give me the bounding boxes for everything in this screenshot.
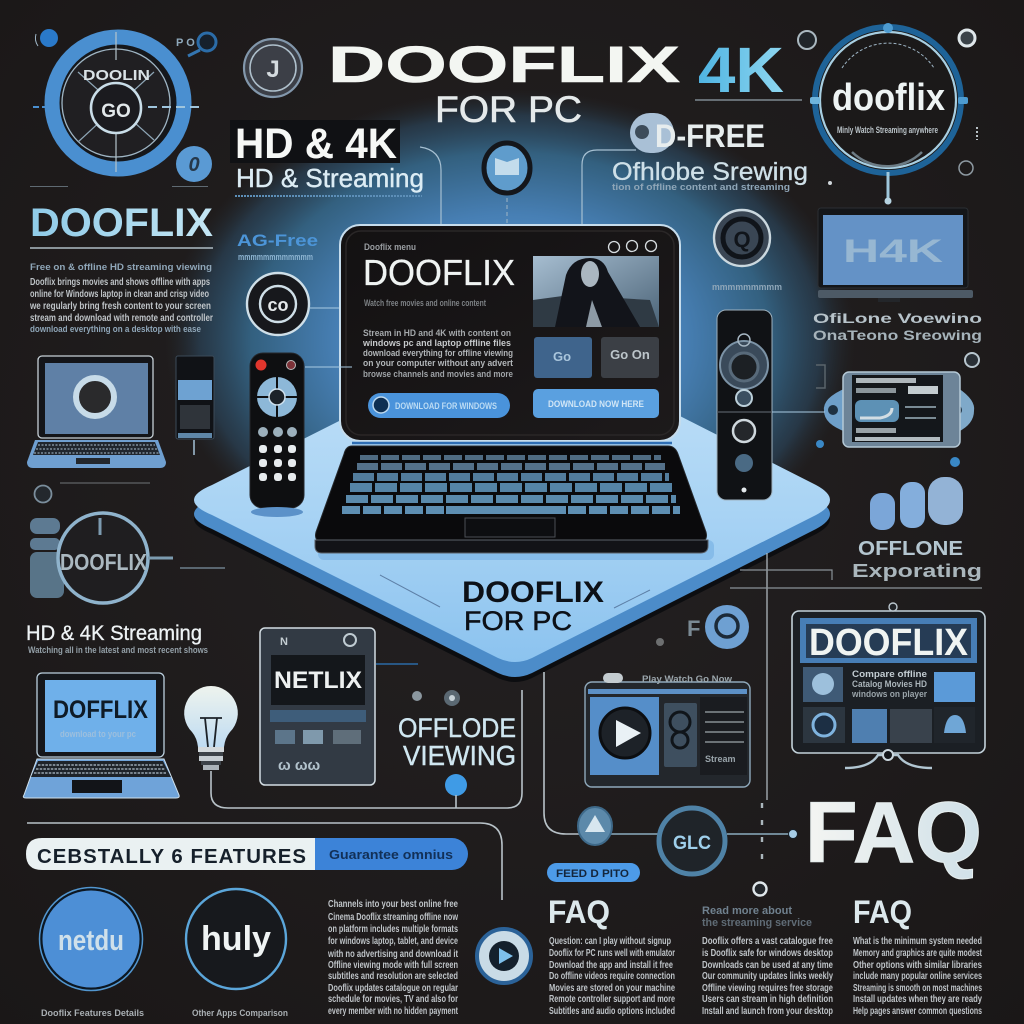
text block: features description: on platform includes multiple formats — [328, 924, 458, 935]
laptop screen: Go On — [610, 347, 650, 362]
connector lines: right lower — [544, 553, 982, 867]
subheading: offline streaming: Ofhlobe Srewing — [612, 158, 808, 186]
panel: netflix tablet: NETLIX — [274, 667, 362, 694]
icon: top centre circle — [484, 143, 530, 193]
laptop screen: DOWNLOAD NOW HERE — [548, 399, 644, 409]
shadow under laptop — [318, 540, 714, 560]
connector end dot — [788, 830, 798, 838]
heading: HD and 4K streaming: HD & 4K Streaming — [26, 622, 202, 645]
laptop screen: DOOFLIX — [363, 252, 515, 293]
faq column one: Remote controller support and more — [549, 994, 675, 1005]
text: Ad-free label — [237, 231, 318, 262]
icon: light bulb — [184, 686, 238, 770]
monitor: top right — [818, 208, 973, 302]
faq column one — [548, 894, 675, 1017]
text block: features description: subtitles and resolution are selected — [328, 971, 458, 982]
text block: features description: with no advertising and download it — [327, 949, 459, 960]
icon: three blue pills — [870, 477, 963, 530]
text block: features description: schedule for movies, TV and also for — [328, 994, 458, 1005]
text block: left description: we regularly bring fresh content to your screen — [29, 301, 211, 312]
small device: left top — [176, 356, 214, 455]
heading: big FAQ: FAQ — [805, 785, 982, 881]
logo: hulu: huly — [201, 920, 271, 958]
features pill: CEBSTALLY 6 FEATURES — [37, 846, 307, 868]
panel: play video: Stream — [705, 754, 736, 764]
icon: right badge: mmmmmmmmm — [712, 282, 782, 292]
text: Ad-free label: mmmmmmmmmmmm — [238, 252, 313, 262]
text block: features description: Dooflix updates catalogue on regular — [328, 983, 458, 994]
laptop screen: browse channels and movies and more — [363, 369, 513, 379]
faq column two: Read more about — [702, 905, 792, 917]
laptop screen: Go — [553, 349, 571, 364]
logo: netdu: netdu — [58, 925, 124, 957]
features pill: Guarantee omnius — [329, 847, 453, 862]
text: offline exporting: OFFLONE — [858, 538, 963, 560]
central blue glow — [120, 80, 910, 600]
pill: blue label — [547, 863, 640, 882]
remote shadow: left — [251, 507, 303, 517]
faq column three: Install updates when they are ready — [853, 994, 982, 1005]
text: offline viewing right: OnaTeono Sreowing — [813, 327, 982, 343]
platform label: DOOFLIX — [462, 576, 604, 609]
monitor: dooflix: Catalog Movies HD — [852, 679, 927, 689]
laptop screen: Dooflix menu — [364, 242, 416, 252]
text block: left description: Dooflix brings movies and shows offline with apps — [30, 277, 210, 288]
dial logo: left middle: DOOFLIX — [60, 549, 148, 575]
laptop screen: on your computer without any advert — [363, 358, 513, 368]
top-left dial icon: GO — [101, 101, 131, 122]
small laptop: dofflix — [23, 673, 179, 798]
panel: netflix tablet: N — [280, 636, 288, 648]
text block: left description: download everything on a desktop with ease — [30, 324, 201, 334]
icon: right badge — [712, 210, 782, 292]
icon: capsule PO: P O — [176, 37, 195, 49]
faq column one: Download the app and install it free — [549, 960, 673, 971]
panel: play video: Play Watch Go Now — [642, 674, 733, 684]
text block: left description: online for Windows laptop in clean and crisp video — [30, 289, 209, 300]
top-right dooflix logo dial: Minly Watch Streaming anywhere — [837, 125, 938, 135]
small laptop: dofflix: download to your pc — [60, 729, 136, 739]
icon: right badge: Q — [733, 227, 751, 252]
faq column one: Question: can I play without signup — [549, 936, 671, 947]
heading: offline viewing: OFFLODE — [398, 713, 516, 743]
faq column two — [702, 905, 833, 1017]
faq column one: FAQ — [548, 894, 610, 930]
faq column two: Dooflix offers a vast catalogue free — [702, 936, 833, 947]
panel: netflix tablet — [260, 628, 418, 785]
small laptop: left top — [27, 356, 166, 468]
text block: left description: stream and download with remote and controller — [30, 313, 213, 324]
laptop keyboard base — [315, 446, 708, 553]
icon: music badge — [244, 39, 302, 97]
icon: F Q badge — [656, 605, 749, 649]
monitor: top right: H4K — [843, 233, 943, 269]
laptop screen — [340, 225, 680, 443]
laptop screen: DOWNLOAD FOR WINDOWS — [395, 401, 497, 411]
text block: features description: Channels into your best online free — [328, 899, 458, 910]
faq column two: Downloads can be used at any time — [702, 960, 833, 971]
monitor: dooflix — [792, 603, 985, 768]
icon: blue zero badge: 0 — [188, 154, 200, 176]
top-left dial icon — [33, 32, 204, 172]
faq column two: the streaming service — [702, 917, 812, 929]
subheading: offline streaming: tion of offline content and streaming — [612, 182, 790, 192]
icon: small ring right of dial — [959, 30, 975, 46]
text: offline viewing right: OfiLone Voewino — [813, 310, 982, 326]
heading: HD and 4K streaming: Watching all in the latest and most recent shows — [28, 645, 208, 655]
text block: features description: Cinema Dooflix streaming offline now — [328, 912, 458, 923]
icon: small ring bottom — [754, 882, 766, 896]
faq column two: Our community updates links weekly — [702, 971, 833, 982]
text: offline exporting — [852, 538, 982, 581]
faq column two: Install and launch from your desktop — [702, 1006, 833, 1017]
faq column one: Movies are stored on your machine — [549, 983, 675, 994]
icon: music badge: J — [266, 56, 280, 83]
pill: blue label: FEED D PITO — [556, 868, 629, 880]
top-left dial icon: DOOLIN — [83, 67, 150, 84]
icon: small ring left — [34, 486, 52, 502]
faq column three: FAQ — [853, 894, 912, 930]
subheading: HD streaming: HD & Streaming — [236, 163, 424, 193]
icon: chip badge — [659, 808, 725, 874]
icon: small ring left of dial — [798, 31, 816, 49]
logo: hulu — [186, 889, 288, 1018]
faq column one: Subtitles and audio options included — [549, 1006, 675, 1017]
platform — [194, 336, 830, 682]
top-right dooflix logo dial — [810, 23, 968, 204]
features pill — [26, 838, 468, 870]
device: right bracket — [824, 372, 974, 447]
laptop screen: Stream in HD and 4K with content on — [363, 328, 511, 338]
logo: netdu — [40, 888, 144, 1018]
icon: small right dots — [816, 353, 979, 467]
faq column one: Dooflix for PC runs well with emulator — [549, 948, 675, 959]
dial logo: left middle — [30, 483, 225, 603]
text: offline exporting: Exporating — [852, 561, 982, 581]
text block: features description: every member with no hidden payment — [328, 1006, 458, 1017]
icon: blue zero badge — [176, 146, 212, 182]
connector to screen — [305, 366, 352, 368]
icon: ad-free badge — [247, 273, 341, 335]
panel: play video — [585, 673, 750, 787]
heading: left DOOFLIX: DOOFLIX — [30, 201, 213, 245]
faq column two: Offline viewing requires free storage — [702, 983, 833, 994]
remote: right — [717, 310, 825, 500]
title — [328, 34, 802, 130]
text: offline viewing right — [813, 310, 982, 343]
heading: ad-free — [630, 113, 765, 154]
text block: left description: Free on & offline HD streaming viewing — [30, 262, 212, 272]
monitor: dooflix: Compare offline — [852, 669, 927, 679]
remote: left — [250, 353, 304, 508]
heading: ad-free: D-FREE — [655, 118, 765, 154]
text block: features description — [327, 899, 459, 1017]
icon: F Q badge: F — [687, 616, 700, 641]
platform label: FOR PC — [464, 606, 572, 636]
top-right dooflix logo dial: dooflix — [832, 77, 945, 119]
monitor: dooflix: DOOFLIX — [809, 622, 969, 664]
laptop screen: download everything for offline viewing — [363, 348, 513, 358]
heading: HD and 4K streaming — [26, 622, 208, 655]
text block: left description — [29, 262, 213, 334]
title: FOR PC — [435, 89, 582, 130]
connector: bulb to offline viewing — [211, 690, 522, 808]
text block: features description: for windows laptop, tablet, and device — [328, 936, 458, 947]
heading: offline viewing — [398, 713, 516, 771]
logo: hulu: Other Apps Comparison — [192, 1008, 288, 1018]
title: DOOFLIX — [328, 36, 680, 93]
divider connector: features — [27, 823, 502, 900]
small icons above offline viewing — [412, 690, 460, 706]
heading: HD and 4K: HD & 4K — [235, 120, 397, 168]
icon: chip badge: GLC — [673, 833, 711, 854]
text: Ad-free label: AG-Free — [237, 231, 318, 250]
panel: netflix tablet: ω ωω — [278, 757, 321, 774]
icon: ad-free badge: co — [267, 295, 289, 315]
faq column three: What is the minimum system needed — [853, 936, 982, 947]
faq column two: Users can stream in high definition — [702, 994, 833, 1005]
faq column three: Other options with similar libraries — [853, 960, 982, 971]
icon: small blue badge — [35, 29, 58, 47]
icon: play circle — [477, 929, 531, 983]
monitor: dooflix: windows on player — [851, 689, 927, 699]
title: 4K — [698, 34, 784, 106]
laptop screen: windows pc and laptop offline files — [362, 338, 511, 348]
platform label — [380, 575, 650, 636]
icon: small marks by dial — [828, 127, 977, 185]
heading: offline viewing: VIEWING — [403, 740, 516, 771]
small laptop: dofflix: DOFFLIX — [53, 696, 148, 724]
laptop screen: Watch free movies and online content — [364, 298, 486, 308]
faq column one: Do offline videos require connection — [549, 971, 675, 982]
logo: netdu: Dooflix Features Details — [41, 1008, 144, 1018]
faq column two: is Dooflix safe for windows desktop — [702, 948, 833, 959]
text: dial captions — [30, 186, 208, 187]
icon: house badge — [578, 807, 612, 845]
icon: capsule PO — [176, 33, 216, 56]
faq column three — [853, 894, 982, 1017]
connector lines to the laptop — [420, 147, 636, 225]
icon: blue drop — [445, 774, 467, 808]
text block: features description: Offline viewing mode with full screen — [328, 960, 458, 971]
